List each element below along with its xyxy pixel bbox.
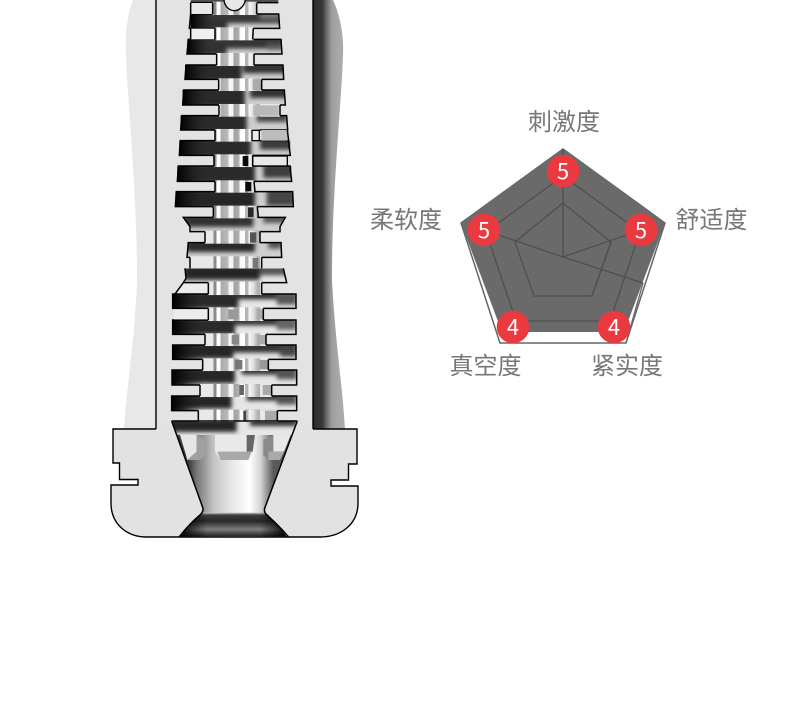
grid lines: [484, 149, 643, 321]
data polygon: [461, 149, 665, 332]
score marker: top: [547, 154, 579, 187]
score marker: bottom left: [497, 310, 529, 343]
left silhouette: [124, 0, 156, 430]
neck openings: [190, 2, 280, 269]
lower ribs and funnel: [167, 265, 307, 537]
score marker: top: 5: [557, 154, 569, 186]
funnel cavity: [172, 421, 297, 537]
base collar: [111, 429, 358, 537]
body: [156, 0, 313, 430]
score marker: right: [625, 213, 657, 246]
upper ribs: [174, 0, 294, 268]
label: softness: 柔软度: [370, 207, 442, 234]
score marker: right: 5: [635, 213, 647, 245]
lower neck openings: [198, 282, 277, 422]
bottom flare: [180, 513, 287, 537]
score marker: bottom right: [598, 310, 630, 343]
top knob: [224, 0, 245, 11]
score marker: bottom left: 4: [507, 310, 519, 342]
left tooth wedge: [175, 283, 208, 294]
neck side walls: [190, 3, 289, 268]
diagram: product cross-section: [111, 0, 358, 537]
label: vacuum: 真空度: [450, 353, 522, 380]
funnel teeth: [180, 435, 291, 460]
score marker: left: [468, 213, 500, 246]
radar chart: [461, 149, 665, 343]
outer grid pentagon: [461, 149, 665, 343]
score marker: bottom right: 4: [608, 310, 620, 342]
label: tightness: 紧实度: [591, 353, 663, 380]
score marker: left: 5: [478, 213, 490, 245]
label: stimulation: 刺激度: [528, 109, 600, 136]
label: comfort: 舒适度: [676, 207, 748, 234]
right shaded silhouette: [313, 0, 345, 430]
